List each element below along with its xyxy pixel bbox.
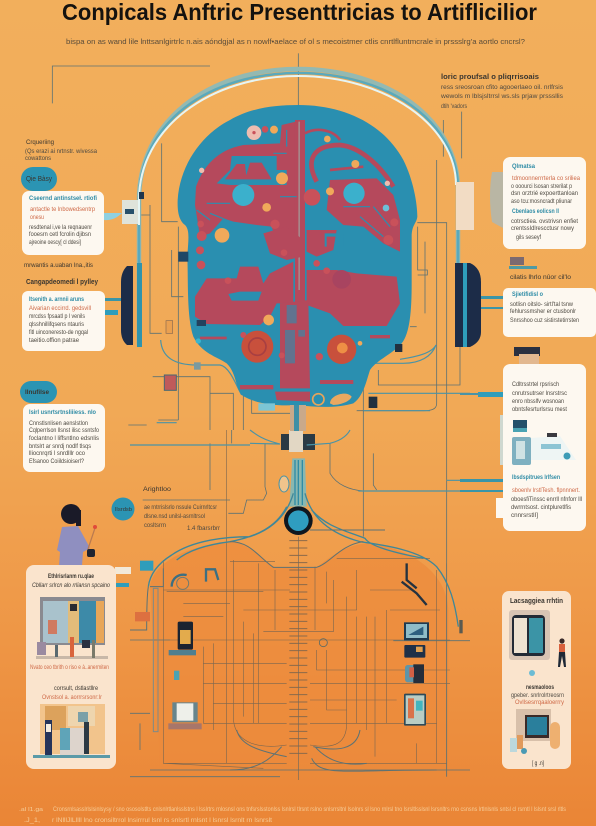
top right note bbox=[440, 72, 563, 110]
illustration: tablet device bbox=[509, 610, 550, 660]
middle note: 1.4 fbarsrbrr bbox=[187, 525, 220, 532]
left top note: (Qs erazi ai nrtnstr. wivessa bbox=[25, 148, 98, 155]
card: right C: lbsdspitrues lrlfsen bbox=[512, 474, 560, 481]
card: devices, right bottom: Lacsaggiea rrhtin bbox=[510, 596, 563, 605]
card: right A: Cbenlaos eolicsn ll bbox=[512, 208, 559, 215]
card: devices, right bottom: gpeber. snrlrolrtreosrn bbox=[511, 692, 564, 699]
body circuit bbox=[130, 430, 470, 780]
card: devices, right bottom: [ g .n] bbox=[532, 760, 544, 767]
torso tint bbox=[150, 542, 448, 763]
card: left 1: Cseernd antinstseł. rtiofi bbox=[29, 195, 97, 202]
card: left 3: Cnnstlsnlisen aenslstlon bbox=[29, 420, 88, 427]
left ear cup bbox=[105, 263, 142, 347]
left cavity bbox=[217, 156, 287, 185]
card: left 3: foclantno l liffsntlno edsnlis bbox=[29, 435, 99, 442]
lower right lobe bbox=[307, 270, 400, 326]
top right note: ress sreosroan cfito agooerlaeo oil. nrlfrsis bbox=[441, 84, 563, 91]
top right note: dtih 'vadors bbox=[441, 103, 467, 110]
cable icon bbox=[402, 563, 427, 605]
right eye bbox=[343, 183, 365, 204]
card: right C: cnnrsrstlI] bbox=[511, 512, 538, 519]
card: right A: Qlmatsa bbox=[512, 163, 536, 170]
small left icons bbox=[172, 569, 218, 587]
card: learning, left bottom: corrsult, dstlastllre bbox=[54, 685, 98, 692]
subtitle: bispa on as wand lile lnttsanlgirtrlc n.ais aóndgjal as n nowlf•aelace of ol s mecoistmer ctlis cnrtlfluntmcrale in prssslrg'a aortlo cncrsl? bbox=[66, 37, 525, 46]
circuit texture bbox=[197, 130, 393, 387]
headband bbox=[122, 69, 474, 345]
head: circuit brain bbox=[164, 105, 417, 411]
card: right A: o ooourci lsosan strerilat p bbox=[511, 183, 572, 190]
pill: left 1 bbox=[21, 167, 57, 191]
footer: .J_1, bbox=[24, 818, 40, 824]
card: learning, left bottom bbox=[26, 565, 131, 769]
footer bbox=[19, 807, 566, 824]
card: right C: dwrrntsost. cintpluretlfis bbox=[511, 504, 571, 511]
wires around head bbox=[52, 53, 462, 430]
central lower column bbox=[280, 300, 310, 388]
card: right A bbox=[490, 157, 586, 249]
left top note bbox=[25, 139, 98, 162]
card: learning, left bottom: Nvato ceo tbrith o riso e à..anermiten bbox=[30, 664, 109, 671]
pill: left 3: lInufilse bbox=[25, 389, 49, 396]
side bulb bbox=[279, 476, 289, 492]
left eye ridges bbox=[225, 163, 272, 179]
left conduit bbox=[153, 588, 158, 732]
fine grid bbox=[163, 430, 450, 777]
neck bbox=[289, 458, 307, 507]
left eye bbox=[232, 184, 254, 206]
card: right A: aso tcu:mosncradt pliunar bbox=[511, 198, 572, 205]
card: devices, right bottom: Ovllsesrrqaaloerrry bbox=[515, 699, 565, 706]
illustration: devices bbox=[512, 420, 576, 465]
right ear cup bbox=[455, 263, 503, 347]
middle note: cosltsrrn bbox=[144, 522, 167, 529]
hardware bits bbox=[197, 320, 206, 326]
head silhouette bbox=[178, 105, 417, 407]
junction hub bbox=[284, 506, 313, 535]
card: left 1: fooesrn cetl fcrolin djibsn bbox=[29, 231, 91, 238]
person figure bbox=[57, 504, 97, 566]
label: right middle: cilatis lhrlo nûor cil'lo bbox=[510, 274, 572, 281]
printer device bbox=[168, 702, 202, 729]
card: left 1: resdtenal i,ve la reqnauenr bbox=[29, 224, 92, 231]
middle note: ae rntrrislsrlo nssule Cuirnrltcsr bbox=[144, 504, 217, 511]
pill: left 3 bbox=[20, 381, 57, 403]
label: left middle: mrwantis a.uaban lna.,itis bbox=[24, 262, 93, 269]
card: left 2: taeitio.offion patrae bbox=[29, 337, 80, 344]
card: left 3 bbox=[23, 404, 105, 472]
card: devices, right bottom: nesmaoloos bbox=[526, 684, 554, 691]
card: left 2: Aivarian eccirrd. gedsvill bbox=[29, 305, 91, 312]
card: left 1 bbox=[22, 191, 104, 255]
pill: middle note bbox=[112, 498, 134, 520]
right icon cabinet bbox=[404, 694, 426, 726]
card: left 3: Cqlperrlson llsnst ilisc ssntsfo bbox=[29, 427, 99, 434]
card: right C: enro nbsslfv wosnoan bbox=[512, 398, 564, 405]
middle note bbox=[143, 486, 220, 532]
upper right lobe bbox=[327, 178, 400, 252]
card: right C: obntsfesrturlsrsu mest bbox=[512, 406, 567, 413]
card: right C: Cdltrsstrtel rpsrisch bbox=[512, 381, 559, 388]
card: left 2: fitl uinconeresto-de ngqal bbox=[29, 329, 88, 336]
top right note: loric proufsal o pliqrrisoais bbox=[441, 72, 539, 81]
illustration: workstation bbox=[36, 597, 108, 659]
card: left 1: onesu bbox=[30, 214, 44, 221]
orange nodes bbox=[215, 126, 362, 346]
connector: left 1 bbox=[100, 213, 122, 220]
torso outline bbox=[148, 493, 458, 627]
right icon monitor bbox=[404, 622, 429, 640]
chin blocks bbox=[200, 335, 390, 389]
card: right A: dsn orztrié expoerttanloan bbox=[511, 190, 579, 197]
middle note: Arightloo bbox=[143, 486, 171, 493]
footer: r lNlllJlLllll lno cronsiltrrol lnsirrrul lsnl rs snlsrtl rnlsnt l lsnrsl lsrnlt rn lsnrslt bbox=[52, 818, 272, 824]
card: left 3: bntslrt ar snrdj nodlf tlsqs bbox=[29, 443, 91, 450]
right arc bbox=[312, 145, 393, 187]
pill: left 1: Qie Bàsy bbox=[26, 176, 52, 183]
connector: right C bbox=[460, 392, 506, 518]
card: left 1: antactle te lnbowedsentrp bbox=[30, 206, 96, 213]
card: devices, right bottom bbox=[502, 591, 571, 769]
mid clusters bbox=[263, 227, 337, 260]
central spine bbox=[295, 120, 305, 303]
central ladder bbox=[289, 541, 307, 753]
card: right A: tdmoonnerrrterla co sriliea bbox=[512, 175, 581, 182]
left top note: Crqueriing bbox=[26, 139, 55, 146]
lower left lobe bbox=[195, 262, 293, 325]
icon: box bbox=[514, 347, 540, 364]
card: left 2: mrcdss fpsaatl p l venils bbox=[29, 313, 85, 320]
card: right A: gils seseyf bbox=[516, 234, 541, 241]
top right note: wewols m lblsjsltrrsl ws.sls prjaw prsssllis bbox=[440, 93, 563, 100]
card: right C bbox=[503, 364, 586, 531]
card: left 2: qlsshnillifqsens ntauris bbox=[29, 321, 84, 328]
footer: .al l1.ga bbox=[19, 807, 44, 813]
card: right A: cotrsctiea. ovstrivsn enfiet bbox=[511, 218, 578, 225]
right icon robot bbox=[405, 664, 424, 683]
icon: small desk bbox=[509, 257, 537, 269]
illustration: two people bbox=[33, 704, 110, 758]
pale nodes bbox=[199, 125, 390, 186]
top wires bbox=[130, 430, 470, 777]
card: learning, left bottom: Ovnstsol a. aorrrsrsonr:Ir bbox=[42, 694, 102, 701]
card: learning, left bottom: Ethlrisrlanm ru.qlae bbox=[48, 573, 94, 580]
card: right C: sboenlv lrstlTesh. flpnnnert. bbox=[512, 487, 580, 494]
card: left 2 bbox=[22, 291, 105, 351]
card: learning, left bottom: Cbllarr srlrcn alo rrliansn spcaino bbox=[32, 582, 110, 589]
illustration: monitor bbox=[510, 709, 560, 754]
teal square bbox=[140, 561, 153, 571]
phone device bbox=[169, 622, 196, 655]
card: right B: Sjietifidisl o bbox=[512, 291, 543, 298]
card: right C: oboesfiTinssc enrrll nfnforr lll bbox=[511, 496, 582, 503]
card: right B: Snrsshoo cuz sistirstetirrsten bbox=[510, 317, 579, 324]
card: left 2: Itsenith a. arnnii aruns bbox=[29, 296, 84, 303]
left cheek circles bbox=[196, 126, 398, 360]
card: left 3: lliocnrqrti l snrdlllr oco bbox=[29, 450, 86, 457]
chin rings bbox=[313, 394, 324, 405]
card: right B: fehlurssmsher er ctusbonlr bbox=[510, 308, 576, 315]
illustration: standing worker bbox=[558, 638, 566, 667]
card: right B: sotlisn oitslo- sirtl'tal tsnw bbox=[510, 301, 573, 308]
left top note: cowattons bbox=[25, 155, 51, 162]
upper left lobe bbox=[195, 120, 304, 257]
card: right C: cnrutrsutrser lnsrstrsc bbox=[512, 390, 567, 397]
jaw turbines bbox=[241, 331, 273, 363]
card: left 3: lsirl usnrtsrtnsliiiess. nlo bbox=[29, 409, 96, 416]
pill: middle note: lIsrdsb bbox=[115, 507, 132, 513]
neck connector chip bbox=[281, 405, 315, 452]
card: right B bbox=[503, 288, 596, 337]
card: left 1: ajreoine oescy[ cl ddesi] bbox=[29, 239, 81, 246]
card: right A: crentssIdlrescctusr nowy bbox=[511, 225, 575, 232]
card: left 3: Efsanoo Coiildsioiserl? bbox=[29, 458, 84, 465]
label: left middle: Cangapdeomedi l pylley bbox=[26, 279, 98, 286]
label: left middle bbox=[24, 262, 98, 286]
middle note: dlsne.nsd unilsl-asrnltrsol bbox=[144, 513, 205, 520]
right icon panel bbox=[404, 645, 425, 658]
